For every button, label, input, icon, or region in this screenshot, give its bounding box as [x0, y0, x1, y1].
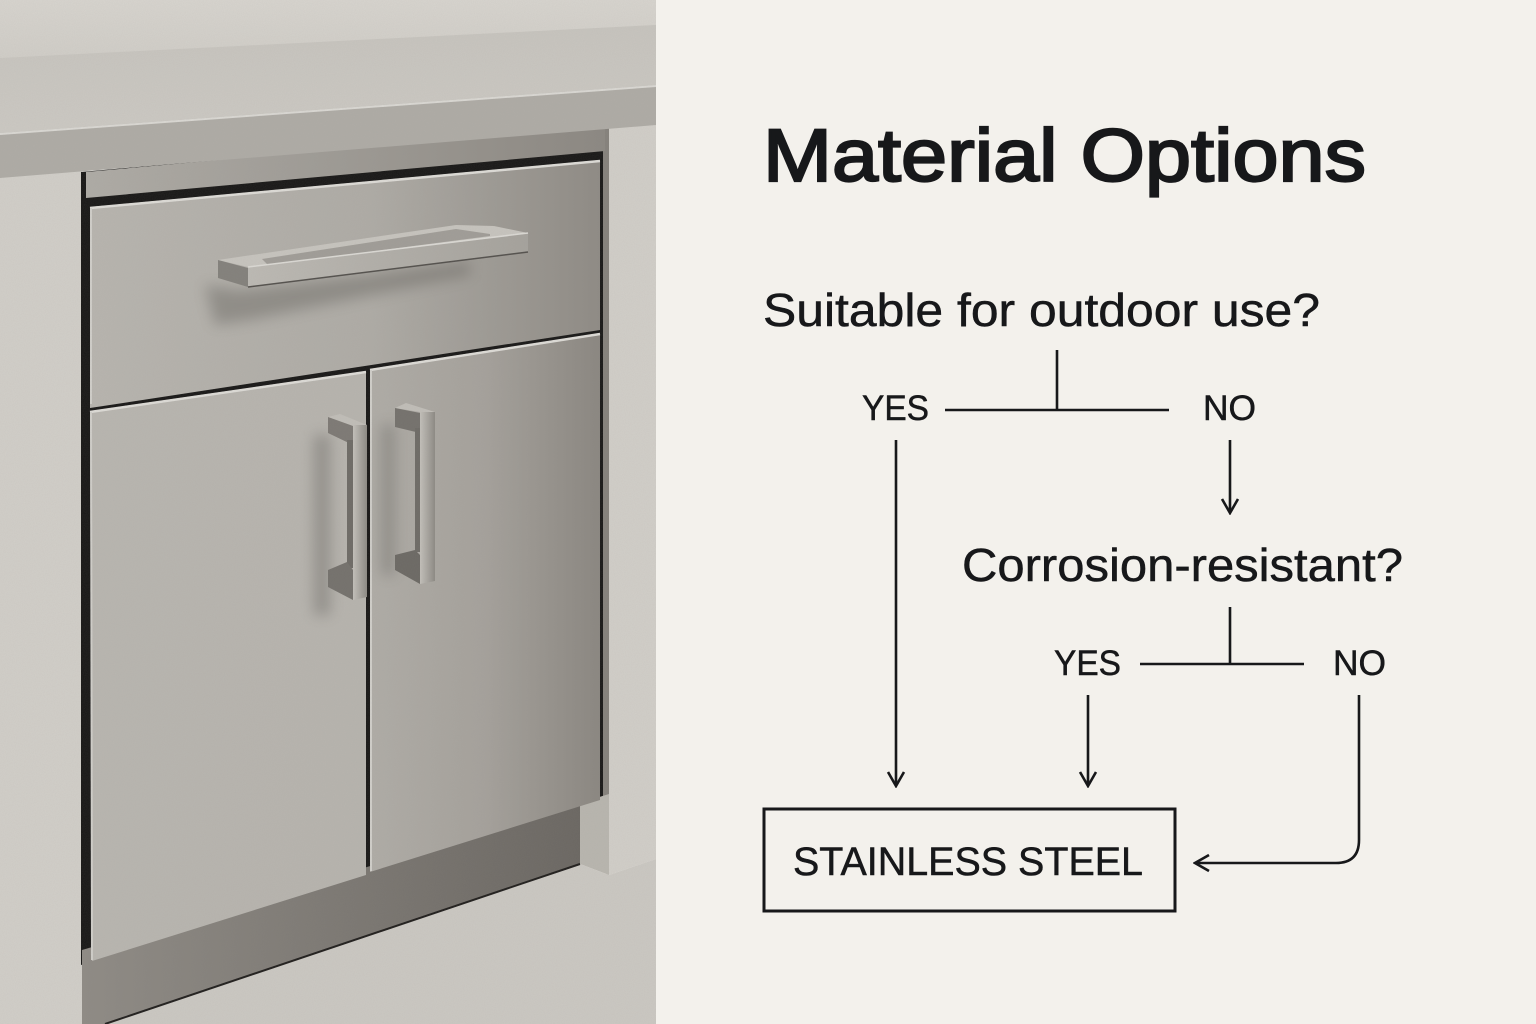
arrow: NO to corrosion question	[1229, 440, 1231, 512]
label: YES: YES	[862, 389, 929, 428]
left side panel	[0, 160, 82, 1024]
title: Material Options	[763, 114, 1366, 197]
drawer front	[90, 160, 600, 408]
surface grain	[0, 0, 656, 1024]
label: NO: NO	[1203, 389, 1256, 428]
left door handle	[328, 414, 367, 600]
branch: outdoor yes/no	[945, 350, 1169, 410]
plinth	[82, 805, 580, 1024]
top rail	[86, 125, 605, 198]
back wall	[0, 0, 656, 60]
question: corrosion: Corrosion-resistant?	[962, 539, 1403, 591]
result box: stainless steel	[764, 809, 1175, 911]
countertop front edge	[0, 85, 656, 178]
question: outdoor use: Suitable for outdoor use?	[763, 284, 1320, 336]
flowchart	[763, 284, 1403, 911]
panel: cabinet photo	[0, 0, 656, 1024]
result box: stainless steel: STAINLESS STEEL	[793, 840, 1143, 884]
floor shadow line	[105, 864, 580, 1024]
floor	[105, 859, 656, 1024]
dark cabinet recess	[81, 125, 604, 965]
drawer handle	[218, 225, 528, 287]
branch: corrosion yes/no	[1140, 607, 1304, 664]
handle shadows	[205, 262, 470, 615]
arrow: corrosion NO to stainless steel	[1196, 695, 1359, 863]
right recess edge	[603, 125, 609, 805]
right door	[370, 333, 600, 872]
left door	[90, 371, 366, 961]
right door handle	[395, 403, 435, 584]
right return face	[580, 794, 609, 875]
countertop surface	[0, 25, 656, 135]
right side panel	[606, 115, 656, 875]
arrow: YES to stainless steel	[895, 440, 897, 785]
label: NO: NO	[1333, 644, 1386, 683]
label: YES: YES	[1054, 644, 1121, 683]
arrow: corrosion YES to stainless steel	[1087, 695, 1089, 785]
